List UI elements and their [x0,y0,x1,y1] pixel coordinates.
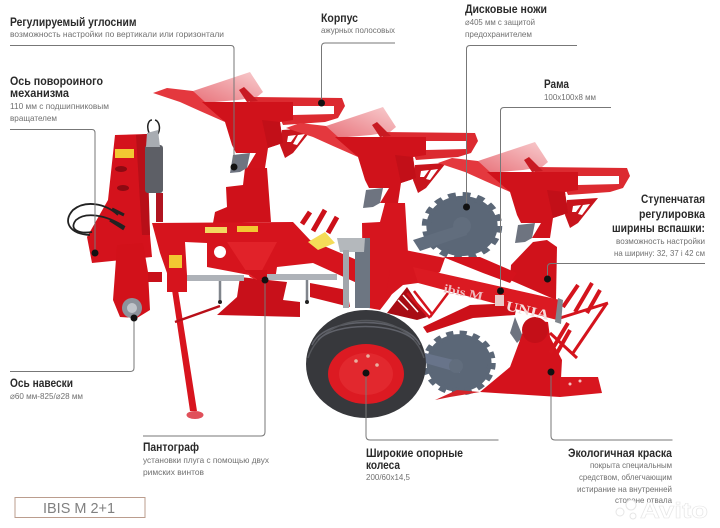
heading: Дисковые ножи [465,4,547,16]
front disc coulter [413,196,498,256]
description: покрыта специальным [590,460,672,470]
heading: Пантограф [143,442,199,454]
description: 200/60x14,5 [366,472,410,482]
description: 110 мм с подшипниковым [10,101,109,111]
description line two: предохранителем [465,29,532,39]
watermark: Avito: Avito [640,498,708,523]
headstock tower [87,134,162,318]
beam logo: UNIA: UNIA [504,299,551,324]
callout: body [318,13,396,106]
callout: eco paint [548,368,673,505]
machine: Ibis M plough [68,72,630,419]
front adjuster lattice [398,291,448,318]
plough body 2 [286,107,478,310]
marker dot [92,250,98,256]
marker dot [362,370,370,376]
lower curved arm [423,303,517,333]
beam logo: ibis M: ibis M [442,281,484,303]
heading line two: регулировка [639,209,706,221]
heading line two: колеса [366,460,401,472]
description: возможность настройки [616,236,705,246]
transport wheel [306,310,426,418]
leader line [143,280,265,436]
marker dot [544,276,551,282]
hydraulic hoses [68,204,125,235]
marker dot [318,100,325,106]
leader line [551,372,672,440]
heading line three: ширины вспашки: [612,223,705,235]
description line two: вращателем [10,113,57,123]
plough body 3 [438,142,630,300]
description: ажурных полосовых [321,25,396,35]
rear plough base [435,317,602,400]
callout: wide support wheels [362,370,498,482]
marker dot [497,288,504,294]
callout: frame [497,79,611,294]
description: установки плуга с помощью двух [143,455,270,465]
pantograph shaft [187,270,337,304]
description: ⌀60 мм-825/⌀28 мм [10,391,83,401]
leader line [322,43,395,103]
heading line two: механизма [10,88,70,100]
rear disc coulter [425,334,492,392]
leader line [548,264,705,279]
description: 100x100x8 мм [544,92,596,102]
callout: stepped width adjustment [544,194,706,282]
heading: Ось навески [10,378,73,390]
callout: disc coulters [463,4,577,210]
right lower bracket [310,283,350,307]
leader line [466,46,577,207]
callout: rotation mechanism axis [10,76,109,256]
callout: adjustable coulter angle [10,17,238,170]
rear adjuster lattice [550,283,608,358]
callout: pantograph [143,276,270,477]
description line two: римских винтов [143,467,204,477]
description line two: средством, облегчающим [579,472,672,482]
heading: Экологичная краска [568,448,673,460]
hydraulic cylinder [145,120,163,222]
model name box: IBIS M 2+1 [43,500,115,517]
marker dot [230,164,238,170]
leader line [500,108,611,291]
tines [302,210,337,233]
leader line [366,373,498,440]
description line four: стороне отвала [615,495,672,505]
lower plough piece [217,277,300,317]
beam logo: UNIA [495,295,551,324]
heading: Корпус [321,13,359,25]
heading: Широкие опорные [366,448,463,460]
marker dot [463,204,470,210]
leader line [10,318,134,372]
leader line [10,130,95,253]
grey wheel adjuster post [337,238,370,308]
marker dot [262,276,268,284]
watermark: Avito [616,498,708,523]
description: ⌀405 мм с защитой [465,17,535,27]
heading: Рама [544,79,570,91]
callout: hitch axle [10,314,138,401]
heading: Ось поворoиного [10,76,103,88]
connector frame [385,250,563,324]
heading: Регулируемый углосним [10,17,136,29]
description line two: на ширину: 32, 37 і 42 см [614,248,705,258]
head beam [152,222,357,292]
heading: Ступенчатая [641,194,705,206]
parking leg [172,290,220,419]
leader line [10,46,234,166]
plough body 1 [153,72,345,223]
marker dot [548,368,554,376]
description: возможность настройки по вертикали или горизонтали [10,29,224,39]
model name box [15,498,145,518]
description line three: истирание на внутренней [577,484,672,494]
marker dot [130,314,138,322]
